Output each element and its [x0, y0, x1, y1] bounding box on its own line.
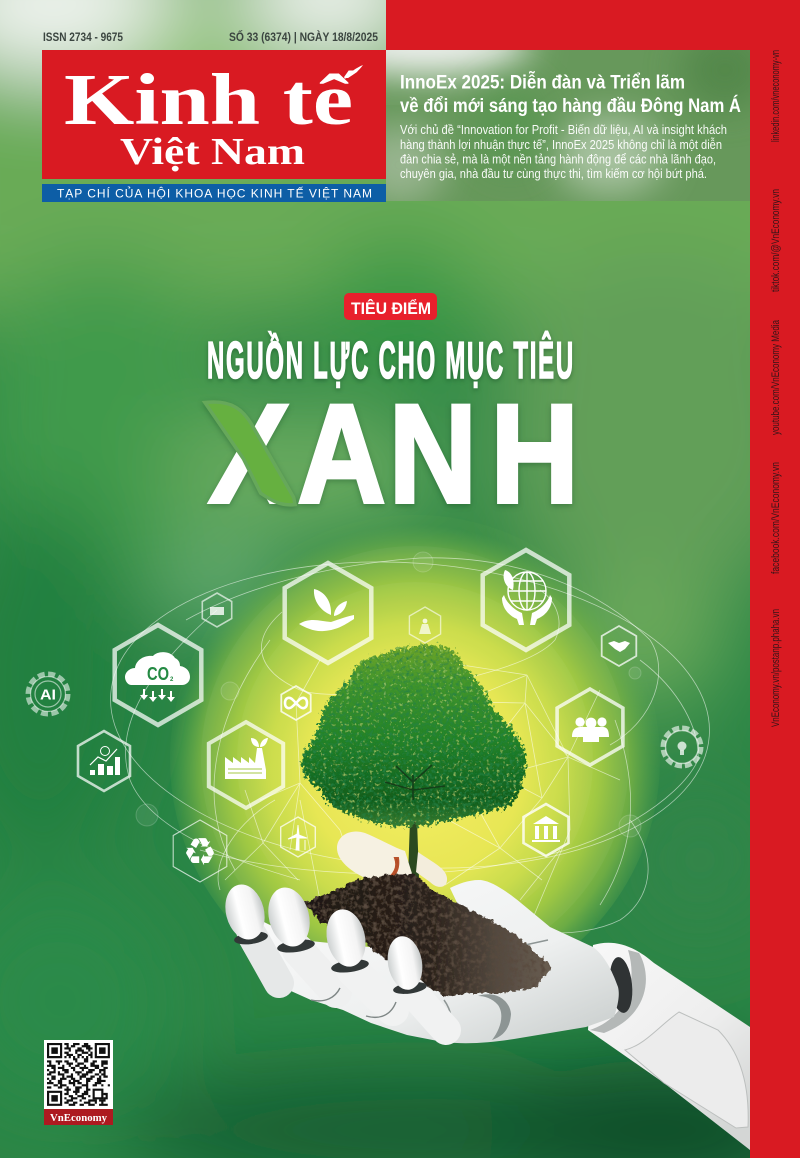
tree branches: [385, 765, 445, 800]
panel body text: [400, 123, 727, 181]
icon: factory with leaves: [209, 722, 283, 808]
icon: CO2 cloud: [115, 625, 201, 725]
icon: financial growth chart: [78, 731, 130, 791]
network lines: [100, 542, 720, 935]
icon: CO2 cloud: CO: [147, 664, 169, 684]
masthead accent: [344, 65, 363, 79]
social: facebook: facebook.com/VnEconomy.vn: [770, 462, 782, 574]
social: website: VnEconomy.vn/postanp.phaha.vn: [770, 609, 782, 727]
robot fingers: [220, 880, 446, 1030]
bubbles: [136, 552, 641, 837]
side band text: [770, 50, 782, 727]
badge: Tiêu điểm: [344, 293, 437, 320]
tree trunk: [408, 792, 419, 878]
icon: people: [557, 689, 623, 765]
soil: [304, 873, 552, 997]
QR code: [44, 1040, 113, 1125]
icon: infinity: [281, 686, 311, 720]
panel heading: InnoEx 2025: Diễn đàn và Triển lãm: [400, 72, 685, 94]
panel body text: Với chủ đề “Innovation for Profit - Biến dữ liệu, AI và insight khách: [400, 123, 727, 137]
icon: globe with hands: [483, 550, 569, 650]
tree: [301, 645, 526, 878]
panel: InnoEx 2025 teaser: [386, 50, 750, 201]
icon: person: [409, 607, 441, 643]
masthead title: Kinh tế: Kinh tế: [64, 59, 357, 140]
headline: NGUỒN LỰC CHO MỤC TIÊU: [207, 330, 573, 390]
headline: XANH with leaf X: XANH: [209, 375, 579, 532]
finger 4: [384, 933, 446, 1030]
icon: small battery: [202, 593, 232, 627]
icon: handshake: [602, 626, 636, 666]
QR code: VnEconomy: [50, 1112, 107, 1124]
seed shell: [337, 831, 447, 887]
finger 3: [321, 906, 396, 1017]
icon: bank: [524, 804, 568, 856]
decorative glow sphere behind tree: [172, 529, 658, 947]
icon: recycle: ♻: [183, 830, 217, 874]
panel body text: hàng thành lợi nhuận thực tế”, InnoEx 2025 không chỉ là một diễn: [400, 137, 722, 152]
hexagon icons: [78, 550, 636, 882]
finger 1: [220, 880, 279, 983]
leaf stroke of X: [208, 404, 293, 503]
forearm: [588, 943, 750, 1150]
tree canopy: [301, 645, 526, 826]
masthead logo: [42, 50, 386, 179]
masthead tagline bar: TẠP CHÍ CỦA HỘI KHOA HỌC KINH TẾ VIỆT NAM: [57, 186, 372, 200]
icon: CO2 cloud: 2: [170, 677, 174, 683]
social: linkedin: linkedin.com/vneconomy-vn: [770, 50, 782, 142]
top strip text: ISSN: ISSN 2734 - 9675: [43, 32, 124, 44]
top strip text: issue and date: SỐ 33 (6374) | NGÀY 18/8/2025: [229, 30, 379, 44]
icon: hand with plant: [285, 563, 371, 663]
icon: wind turbine: [281, 817, 315, 857]
forearm panel: [625, 1012, 748, 1128]
wrist joint: [607, 956, 635, 1014]
panel: InnoEx 2025 teaser: về đổi mới sáng tạo hàng đầu Đông Nam Á: [400, 95, 741, 117]
robot hand palm: [236, 880, 619, 1043]
badge: Tiêu điểm: TIÊU ĐIỂM: [351, 299, 431, 318]
icon: AI gear: [28, 674, 68, 714]
icon: light bulb gear: [663, 728, 701, 766]
red frame: top and right band: [386, 0, 800, 1158]
social: tiktok: tiktok.com/@VnEconomy.vn: [770, 189, 782, 292]
icon: recycle: [173, 820, 227, 882]
panel body text: đàn chia sẻ, mà là một nền tảng hành động để các nhà lãnh đạo,: [400, 152, 716, 166]
robot arm: [588, 943, 750, 1150]
social: youtube: youtube.com/VnEconomy Media: [770, 319, 782, 435]
panel body text: chuyên gia, nhà đầu tư cùng thực thi, tìm kiếm cơ hội bứt phá.: [400, 167, 707, 181]
finger 2: [262, 883, 340, 1001]
thumb joint: [478, 994, 511, 1040]
icon: AI gear: AI: [40, 686, 56, 704]
wrist band: [590, 950, 646, 1033]
masthead title: Việt Nam: Việt Nam: [120, 131, 305, 173]
palm crease: [444, 940, 548, 1040]
